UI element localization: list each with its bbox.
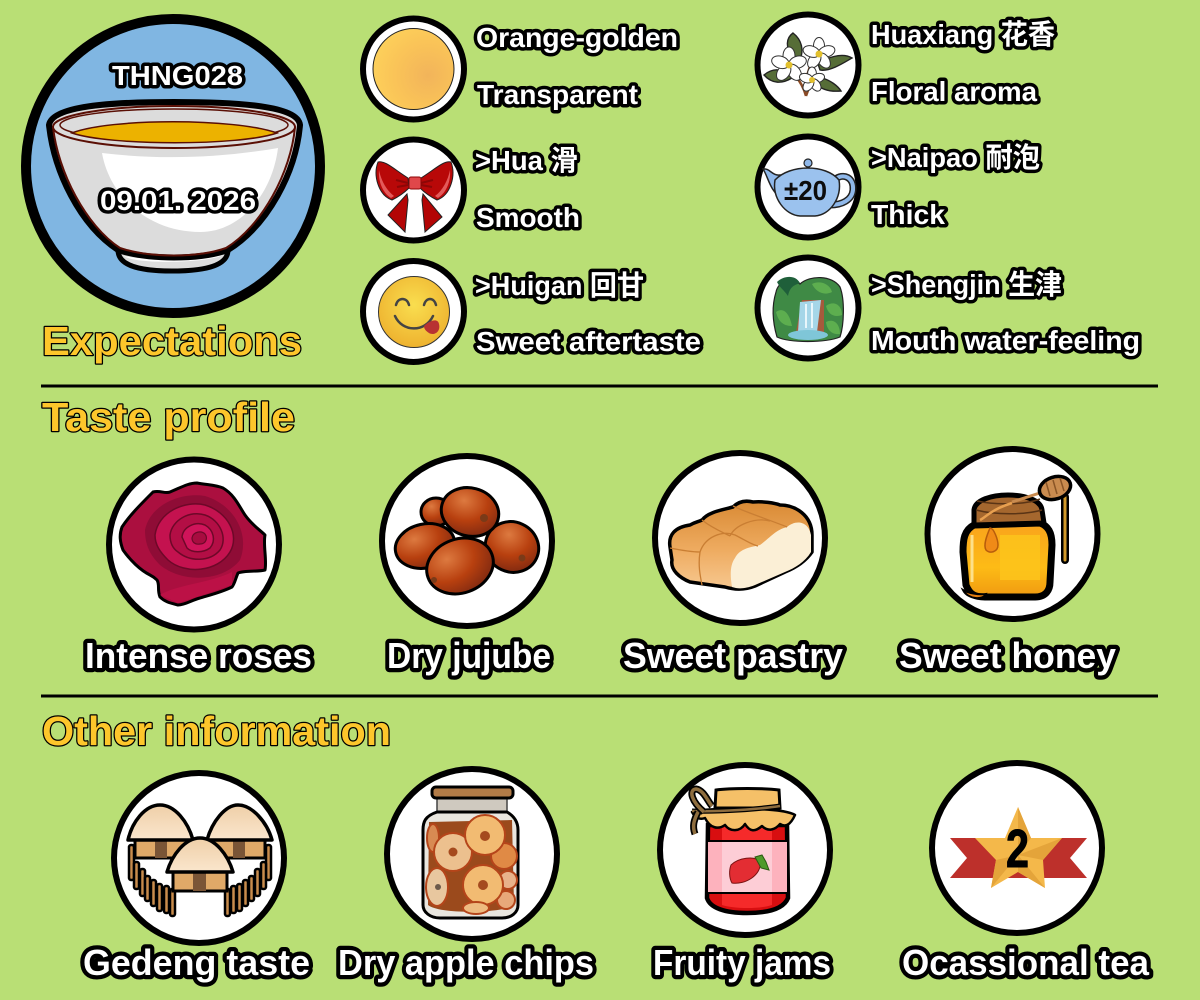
heading: taste profile: Taste profile <box>42 394 295 440</box>
icon: jar of apple chips <box>387 769 557 939</box>
item: colour <box>363 18 678 120</box>
label: dry jujube: Dry jujube <box>387 635 551 676</box>
text: shengjin <box>871 269 1140 356</box>
icon: strawberry jam jar <box>660 765 830 935</box>
batch code: THNG028 <box>112 60 243 91</box>
text: naipao: Thick <box>871 199 945 230</box>
taste: jujube <box>382 456 552 676</box>
text: huaxiang <box>871 19 1055 107</box>
icon: blue teapot <box>758 136 858 238</box>
other: jam <box>653 765 831 983</box>
taste: honey <box>899 449 1116 676</box>
text: huigan <box>475 270 701 357</box>
label: gedeng taste: Gedeng taste <box>83 942 310 983</box>
item: huigan <box>363 261 701 362</box>
label: ocassional tea: Ocassional tea <box>902 942 1150 983</box>
text: colour: Orange-golden <box>476 22 678 53</box>
item: naipao <box>758 136 1040 238</box>
text: hua <box>475 145 580 233</box>
label: sweet pastry: Sweet pastry <box>623 635 843 676</box>
icon: jungle waterfall <box>758 258 858 358</box>
label: dry apple chips: Dry apple chips <box>338 942 594 983</box>
text: hua: >Hua 滑 <box>475 145 578 176</box>
text: naipao: >Naipao 耐泡 <box>871 142 1040 173</box>
icon: smiling face <box>363 261 464 362</box>
icon: milk bread <box>655 453 825 623</box>
text: colour <box>476 22 678 110</box>
text: huaxiang: Floral aroma <box>871 76 1037 107</box>
text: huigan: >Huigan 回甘 <box>475 270 644 301</box>
other: occasional tea <box>902 763 1150 983</box>
label: intense roses: Intense roses <box>85 635 312 676</box>
other: gedeng <box>83 773 310 983</box>
text: colour: Transparent <box>477 79 638 110</box>
icon: star rating <box>932 763 1102 933</box>
icon: thatched huts <box>114 773 284 943</box>
heading: expectations: Expectations <box>42 318 302 364</box>
icon: white flowers <box>758 14 858 116</box>
item: shengjin <box>758 258 1140 358</box>
date: 09.01. 2026 <box>100 185 256 216</box>
item: hua <box>363 140 580 240</box>
main bowl badge <box>26 19 320 313</box>
icon: blue teapot: ±20 <box>784 175 827 206</box>
icon: honey jar <box>928 449 1098 619</box>
text: shengjin: Mouth water-feeling <box>871 325 1140 356</box>
taste: roses <box>85 460 312 676</box>
text: huaxiang: Huaxiang 花香 <box>871 19 1055 50</box>
label: fruity jams: Fruity jams <box>653 942 831 983</box>
label: sweet honey: Sweet honey <box>899 635 1116 676</box>
icon: tea bowl <box>49 102 300 271</box>
icon: tea colour swatch <box>363 18 464 120</box>
text: naipao <box>871 142 1040 230</box>
icon: red rose <box>109 460 279 630</box>
icon: red bow <box>363 140 464 240</box>
heading: other information: Other information <box>42 708 391 754</box>
badge circle <box>26 19 320 313</box>
text: hua: Smooth <box>476 202 580 233</box>
item: huaxiang <box>758 14 1055 116</box>
taste: pastry <box>623 453 843 676</box>
text: huigan: Sweet aftertaste <box>476 326 701 357</box>
other: apple chips <box>338 769 594 983</box>
text: shengjin: >Shengjin 生津 <box>871 269 1062 300</box>
icon: star rating: 2 <box>1006 819 1029 879</box>
icon: jujube fruits <box>382 456 552 626</box>
